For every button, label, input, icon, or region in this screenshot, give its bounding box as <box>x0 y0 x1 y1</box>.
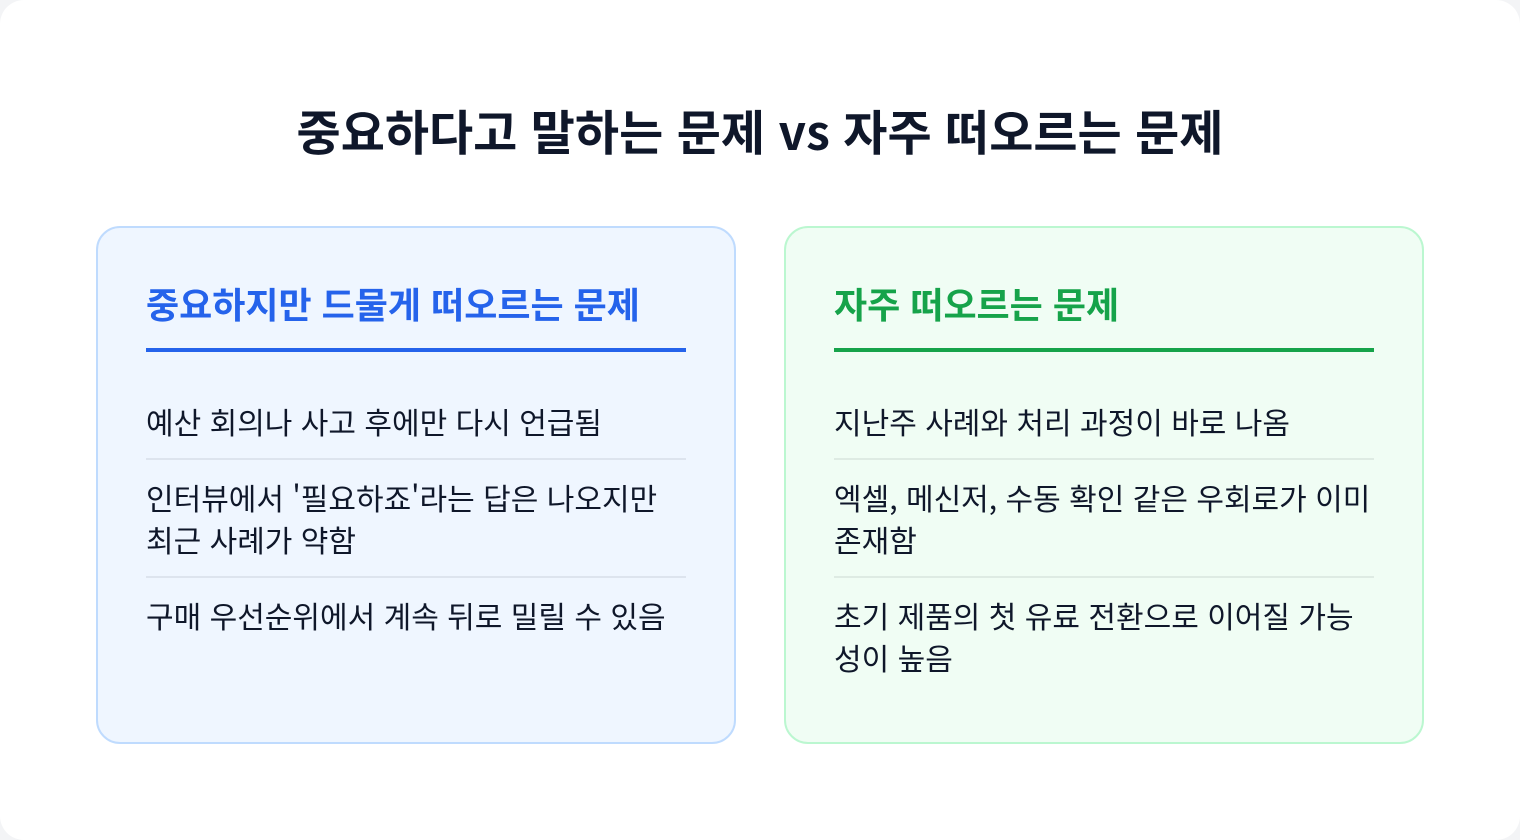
text block: existing workarounds: 엑셀, 메신저, 수동 확인 같은 우회로가 이미 <box>834 475 1370 519</box>
text block: budget meetings: 예산 회의나 사고 후에만 다시 언급됨 <box>146 399 602 443</box>
text block: existing workarounds: 존재함 <box>834 517 917 561</box>
panel heading: important but rarely recalled: 중요하지만 드물게 떠오르는 문제 <box>146 277 640 329</box>
panel: important but rarely recalled problems <box>96 226 736 744</box>
panel: frequently recalled problems <box>784 226 1424 744</box>
text block: existing workarounds <box>834 475 1370 561</box>
panel heading: frequently recalled <box>834 276 1374 352</box>
text block: interview answers: 최근 사례가 약함 <box>146 517 356 561</box>
text block: interview answers: 인터뷰에서 '필요하죠'라는 답은 나오지만 <box>146 475 657 519</box>
text block: purchase priority: 구매 우선순위에서 계속 뒤로 밀릴 수 있음 <box>146 593 666 637</box>
title: 중요하다고 말하는 문제 vs 자주 떠오르는 문제 <box>297 94 1223 164</box>
text block: first paid conversion: 성이 높음 <box>834 635 953 679</box>
panel heading: frequently recalled: 자주 떠오르는 문제 <box>834 277 1119 329</box>
text block: first paid conversion <box>834 593 1354 679</box>
text block: last week's case: 지난주 사례와 처리 과정이 바로 나옴 <box>834 399 1290 443</box>
text block: interview answers <box>146 475 657 561</box>
text block: first paid conversion: 초기 제품의 첫 유료 전환으로 이어질 가능 <box>834 593 1354 637</box>
panel heading: important but rarely recalled <box>146 276 686 352</box>
